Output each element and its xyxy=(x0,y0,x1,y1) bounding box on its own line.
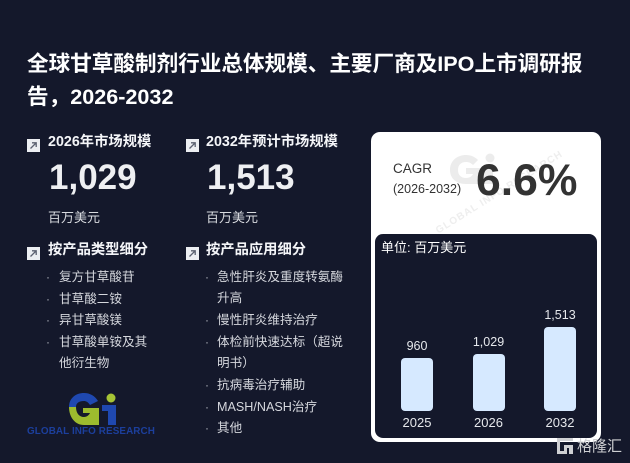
icon: arrow product application xyxy=(186,247,199,260)
heading: 2026 market size: 2026年市场规模 xyxy=(48,134,151,150)
list: product applications: · xyxy=(205,378,209,392)
list: product types: · xyxy=(46,335,50,349)
value: 2026: 1,029 xyxy=(473,335,504,349)
title: 全球甘草酸制剂行业总体规模、主要厂商及IPO上市调研报 xyxy=(27,51,582,76)
list: product types: · xyxy=(46,270,50,284)
heading: 2032 forecast market size: 2032年预计市场规模 xyxy=(206,134,338,150)
list: product types: 甘草酸单铵及其 xyxy=(59,335,147,349)
list: product applications: · xyxy=(205,270,209,284)
watermark: Gi logo xyxy=(450,154,494,184)
heading: by product application: 按产品应用细分 xyxy=(206,242,306,258)
list: product types: 甘草酸二铵 xyxy=(59,292,122,306)
list: product applications: 体检前快速达标（超说 xyxy=(217,335,343,349)
heading: by product type: 按产品类型细分 xyxy=(48,242,148,258)
value: 2032 market size: 1,513 xyxy=(207,158,295,197)
list: product applications: 慢性肝炎维持治疗 xyxy=(217,313,318,327)
bar chart xyxy=(401,308,576,430)
panel: bar chart xyxy=(375,234,597,438)
list: product applications xyxy=(205,270,343,435)
list: product applications: MASH/NASH治疗 xyxy=(217,400,317,414)
logo: Global Info Research: GLOBAL INFO RESEARCH xyxy=(27,426,155,437)
year: 2032: 2032 xyxy=(546,415,574,430)
value: CAGR: 6.6% xyxy=(476,156,577,205)
list: product applications: · xyxy=(205,335,209,349)
year: 2025: 2025 xyxy=(403,415,431,430)
unit: 2026 market size: 百万美元 xyxy=(48,210,100,225)
title: 告，2026-2032 xyxy=(27,84,173,109)
list: product applications: 急性肝炎及重度转氨酶 xyxy=(217,270,343,284)
title xyxy=(27,51,582,109)
year: 2026: 2026 xyxy=(474,415,503,430)
list: product applications: 其他 xyxy=(217,421,242,435)
list: product applications: 明书） xyxy=(217,356,255,370)
list: product types: 异甘草酸镁 xyxy=(59,313,122,327)
bar: 2025 xyxy=(401,358,433,411)
list: product applications: · xyxy=(205,313,209,327)
icon: arrow 2026 market size xyxy=(27,139,40,152)
value: 2032: 1,513 xyxy=(544,308,576,322)
watermark: rotated brand text: GLOBAL INFO RESEARCH xyxy=(434,149,565,236)
list: product types xyxy=(46,270,147,370)
list: product applications: 升高 xyxy=(217,291,242,305)
list: product types: · xyxy=(46,292,50,306)
bar: 2026 xyxy=(472,354,504,411)
bar: 2032 xyxy=(544,327,576,411)
logo: Gelonghui watermark: 格隆汇 xyxy=(577,438,622,455)
list: product types: 他衍生物 xyxy=(59,356,109,370)
logo: Global Info Research xyxy=(27,393,155,437)
list: product applications: 抗病毒治疗辅助 xyxy=(217,378,305,392)
label: CAGR: CAGR xyxy=(393,161,432,176)
panel: CAGR card xyxy=(371,132,601,442)
list: product types: · xyxy=(46,313,50,327)
list: product applications: · xyxy=(205,421,209,435)
list: product types: 复方甘草酸苷 xyxy=(59,270,135,284)
icon: arrow product type xyxy=(27,247,40,260)
list: product applications: · xyxy=(205,400,209,414)
value: 2025: 960 xyxy=(407,339,427,353)
chart unit label: 单位: 百万美元 xyxy=(381,240,466,255)
label: CAGR period: (2026-2032) xyxy=(393,182,461,196)
logo: Gelonghui watermark xyxy=(557,438,622,455)
unit: 2032 market size: 百万美元 xyxy=(206,210,258,225)
icon: arrow 2032 market size xyxy=(186,139,199,152)
value: 2026 market size: 1,029 xyxy=(49,158,137,197)
